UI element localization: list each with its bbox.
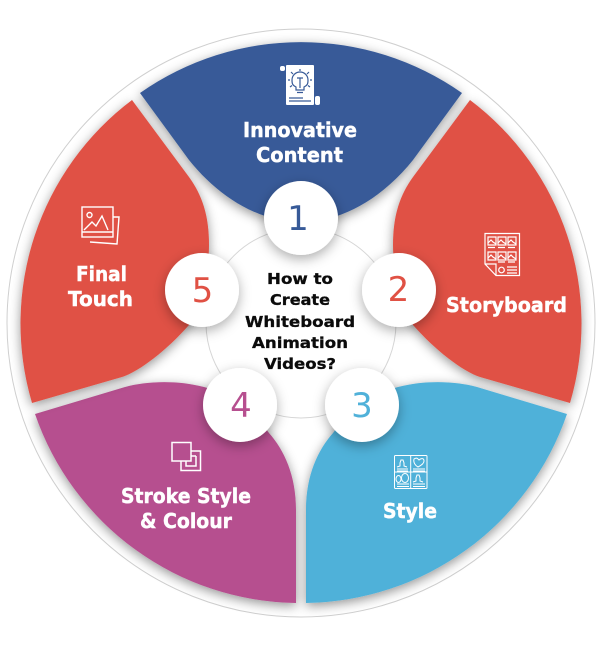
badge 3: 3 (351, 386, 373, 426)
icon: style grid (394, 456, 427, 488)
segment: red right (393, 100, 581, 403)
centre title: Animation (252, 334, 348, 352)
centre title: Videos? (264, 355, 336, 373)
badge 3 (325, 368, 399, 442)
panel: storyboard (393, 100, 581, 403)
icon: idea document (280, 65, 320, 105)
badge 5: 5 (192, 271, 213, 311)
centre title (245, 270, 355, 373)
centre circle (206, 228, 396, 418)
label: style: Style (383, 499, 437, 523)
label: final touch: Final (76, 262, 127, 286)
panel: innovative content (140, 42, 462, 222)
badge 5 (165, 253, 239, 327)
badge 4: 4 (230, 386, 252, 426)
icon: storyboard sheet (485, 234, 520, 276)
icon: overlapping squares (172, 442, 200, 470)
segment: purple (35, 382, 296, 603)
segment: blue (140, 42, 462, 222)
centre title: Create (270, 291, 330, 309)
label: innovative content (243, 118, 357, 167)
label: stroke style and colour: & Colour (140, 509, 233, 533)
segment: red left (21, 100, 209, 403)
badge 2: 2 (388, 270, 409, 310)
panel: style (306, 382, 567, 603)
segment: sky blue (306, 382, 567, 603)
badge 4 (203, 368, 277, 442)
label: stroke style and colour: Stroke Style (121, 484, 251, 508)
label: final touch: Touch (68, 287, 133, 311)
label: stroke style and colour (121, 484, 251, 533)
badge 1: 1 (287, 199, 309, 239)
icon: picture stack (82, 207, 119, 244)
centre title: Whiteboard (245, 313, 355, 331)
panel: stroke style and colour (35, 382, 296, 603)
panel: final touch (21, 100, 209, 403)
centre title: How to (267, 270, 333, 288)
label: final touch (68, 262, 133, 311)
label: storyboard: Storyboard (446, 293, 567, 317)
badge 2 (362, 253, 436, 327)
badge 1 (264, 181, 338, 255)
label: innovative content: Content (256, 143, 343, 167)
label: innovative content: Innovative (243, 118, 357, 142)
